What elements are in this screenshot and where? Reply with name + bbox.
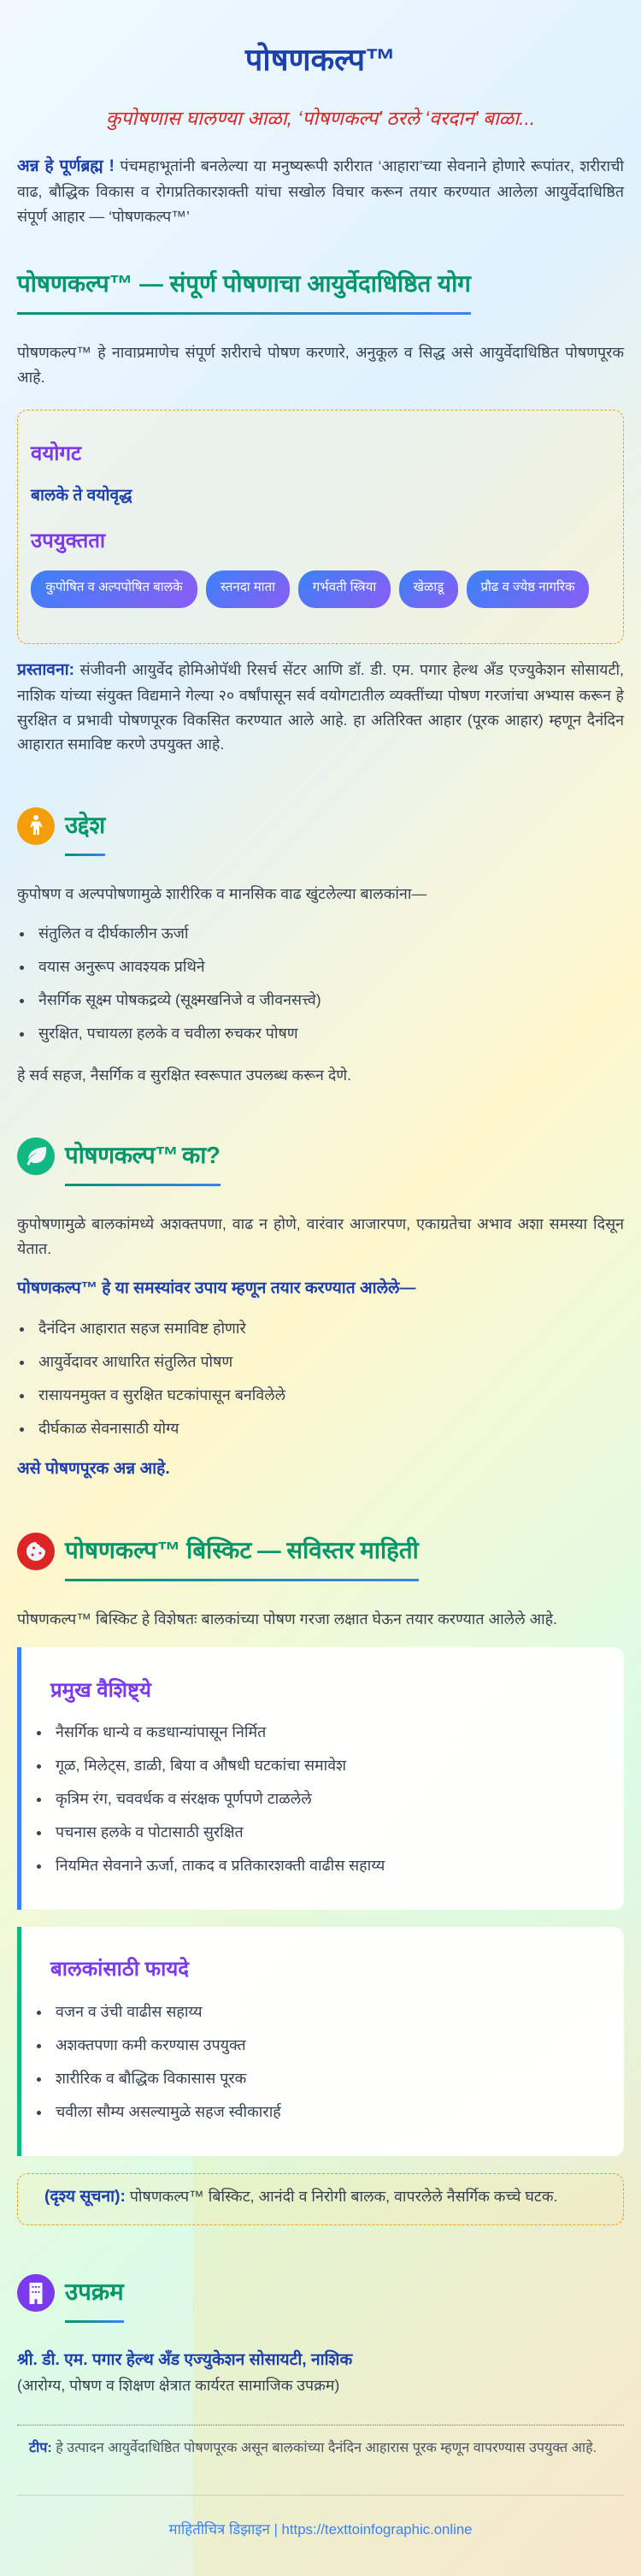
pill [298,570,391,608]
closing statement: असे पोषणपूरक अन्न आहे. [17,1460,170,1478]
description: पोषणकल्प™ बिस्किट हे विशेषतः बालकांच्या पोषण गरजा लक्षात घेऊन तयार करण्यात आलेले आहे. [17,1610,557,1628]
title: पोषणकल्प™ [245,42,396,77]
section: initiative [17,2274,353,2394]
heading [65,811,106,856]
icon: cookie [17,1533,55,1570]
age group heading: वयोगट [31,442,81,465]
tip note: टीप: हे उत्पादन आयुर्वेदाधिष्ठित पोषणपूरक असून बालकांच्या दैनंदिन आहारास पूरक म्हणून वापरण्यास उपयुक्त आहे. [29,2440,597,2455]
heading: उपक्रम [65,2278,124,2305]
heading [65,1536,420,1581]
benefits list: शारीरिक व बौद्धिक विकासास पूरक [56,2070,246,2087]
heading: पोषणकल्प™ बिस्किट — सविस्तर माहिती [65,1537,419,1563]
benefits list: अशक्तपणा कमी करण्यास उपयुक्त [56,2036,246,2053]
intro paragraph: अन्न हे पूर्णब्रह्म ! पंचमहाभूतांनी बनलेल्या या मनुष्यरूपी शरीरात ‘आहारा’च्या सेवनाने होणारे रूपांतर, शरीराची वाढ, बौद्धिक विकास व रोगप्रतिकारशक्ती यांचा सखोल विचार करून तयार करण्यात आलेला आयुर्वेदाधिष्ठित संपूर्ण आहार — ‘पोषणकल्प™’ [17,157,624,225]
footer: माहितीचित्र डिझाइन | https://texttoinfographic.online [168,2521,473,2538]
description: पोषणकल्प™ हे नावाप्रमाणेच संपूर्ण शरीराचे पोषण करणारे, अनुकूल व सिद्ध असे आयुर्वेदाधिष्ठित पोषणपूरक आहे. [17,344,624,386]
list of reasons: दीर्घकाळ सेवनासाठी योग्य [38,1420,179,1437]
section: objective [17,807,427,1084]
description: कुपोषणामुळे बालकांमध्ये अशक्तपणा, वाढ न होणे, वारंवार आजारपण, एकाग्रतेचा अभाव अशा समस्या दिसून येतात. [17,1215,624,1257]
list of objectives: वयास अनुरूप आवश्यक प्रथिने [38,958,205,975]
list of objectives: नैसर्गिक सूक्ष्म पोषकद्रव्ये (सूक्ष्मखनिजे व जीवनसत्त्वे) [38,991,321,1008]
icon: building [17,2274,55,2312]
list of reasons [20,1320,285,1437]
callout: visual note [17,2173,624,2225]
pill: स्तनदा माता [221,580,275,594]
footer [17,2495,624,2546]
benefits heading: बालकांसाठी फायदे [50,1958,189,1981]
heading: पोषणकल्प™ का? [65,1142,221,1168]
icon: leaf [17,1137,55,1175]
pill: खेळाडू [414,580,444,594]
heading [65,2278,125,2323]
heading [65,1141,221,1186]
list of reasons: रासायनमुक्त व सुरक्षित घटकांपासून बनविलेले [38,1386,285,1403]
section: why [17,1137,624,1479]
pill [206,570,290,608]
benefits list: वजन व उंची वाढीस सहाय्य [56,2003,203,2020]
list of reasons: आयुर्वेदावर आधारित संतुलित पोषण [38,1353,232,1370]
pill [31,570,197,608]
pill: गर्भवती स्त्रिया [313,580,376,594]
age group value: बालके ते वयोवृद्ध [31,487,132,505]
features list: गूळ, मिलेट्स, डाळी, बिया व औषधी घटकांचा समावेश [56,1757,346,1774]
features list: पचनास हलके व पोटासाठी सुरक्षित [56,1823,244,1840]
highlighted statement: पोषणकल्प™ हे या समस्यांवर उपाय म्हणून तयार करण्यात आलेले— [17,1279,416,1297]
features list: कृत्रिम रंग, चववर्धक व संरक्षक पूर्णपणे टाळलेले [56,1790,312,1807]
features list [37,1723,385,1874]
pill: प्रौढ व ज्येष्ठ नागरिक [480,580,575,594]
features list: नियमित सेवनाने ऊर्जा, ताकद व प्रतिकारशक्ती वाढीस सहाय्य [56,1857,385,1874]
benefits list [37,2003,281,2121]
section: complete nutrition formula [17,270,624,753]
list of objectives [20,925,321,1043]
list of reasons: दैनंदिन आहारात सहज समाविष्ट होणारे [38,1320,246,1337]
callout text: (दृश्य सूचना): पोषणकल्प™ बिस्किट, आनंदी व निरोगी बालक, वापरलेले नैसर्गिक कच्चे घटक. [44,2188,557,2206]
heading: पोषणकल्प™ — संपूर्ण पोषणाचा आयुर्वेदाधिष्ठित योग [17,270,471,297]
icon: child [17,807,55,845]
tip note [17,2425,624,2471]
suitability heading: उपयुक्तता [31,529,105,552]
panel: benefits for children [17,1927,624,2156]
features heading: प्रमुख वैशिष्ट्ये [50,1679,151,1702]
preface paragraph: प्रस्तावना: संजीवनी आयुर्वेद होमिओपॅथी रिसर्च सेंटर आणि डॉ. डी. एम. पगार हेल्थ अँड एज्युकेशन सोसायटी, नाशिक यांच्या संयुक्त विद्यमाने गेल्या २० वर्षांपासून सर्व वयोगटातील व्यक्तींच्या पोषण गरजांचा अभ्यास करून हे सुरक्षित व प्रभावी पोषणपूरक विकसित करण्यात आले आहे. हा अतिरिक्त आहार (पूरक आहार) म्हणून दैनंदिन आहारात समाविष्ट करणे उपयुक्त आहे. [17,661,624,753]
organisation description: (आरोग्य, पोषण व शिक्षण क्षेत्रात कार्यरत सामाजिक उपक्रम) [17,2377,339,2394]
section: biscuit details [17,1533,624,2225]
pill [399,570,458,608]
closing text: हे सर्व सहज, नैसर्गिक व सुरक्षित स्वरूपात उपलब्ध करून देणे. [17,1066,351,1084]
heading: उद्देश [65,812,105,838]
heading [17,270,472,315]
subtitle: कुपोषणास घालण्या आळा, ‘पोषणकल्प’ ठरले ‘वरदान’ बाळा... [106,107,535,129]
organisation name: श्री. डी. एम. पगार हेल्थ अँड एज्युकेशन सोसायटी, नाशिक [17,2351,352,2369]
features list: नैसर्गिक धान्ये व कडधान्यांपासून निर्मित [56,1723,266,1740]
pill: कुपोषित व अल्पपोषित बालके [45,580,183,594]
suitability pills [31,570,589,608]
panel: key features [17,1647,624,1910]
pill [467,570,589,608]
list of objectives: संतुलित व दीर्घकालीन ऊर्जा [38,925,189,942]
benefits list: चवीला सौम्य असल्यामुळे सहज स्वीकारार्ह [56,2103,281,2120]
panel: age group and suitability [17,410,624,644]
lead text: कुपोषण व अल्पपोषणामुळे शारीरिक व मानसिक वाढ खुंटलेल्या बालकांना— [17,885,426,902]
list of objectives: सुरक्षित, पचायला हलके व चवीला रुचकर पोषण [38,1025,298,1042]
